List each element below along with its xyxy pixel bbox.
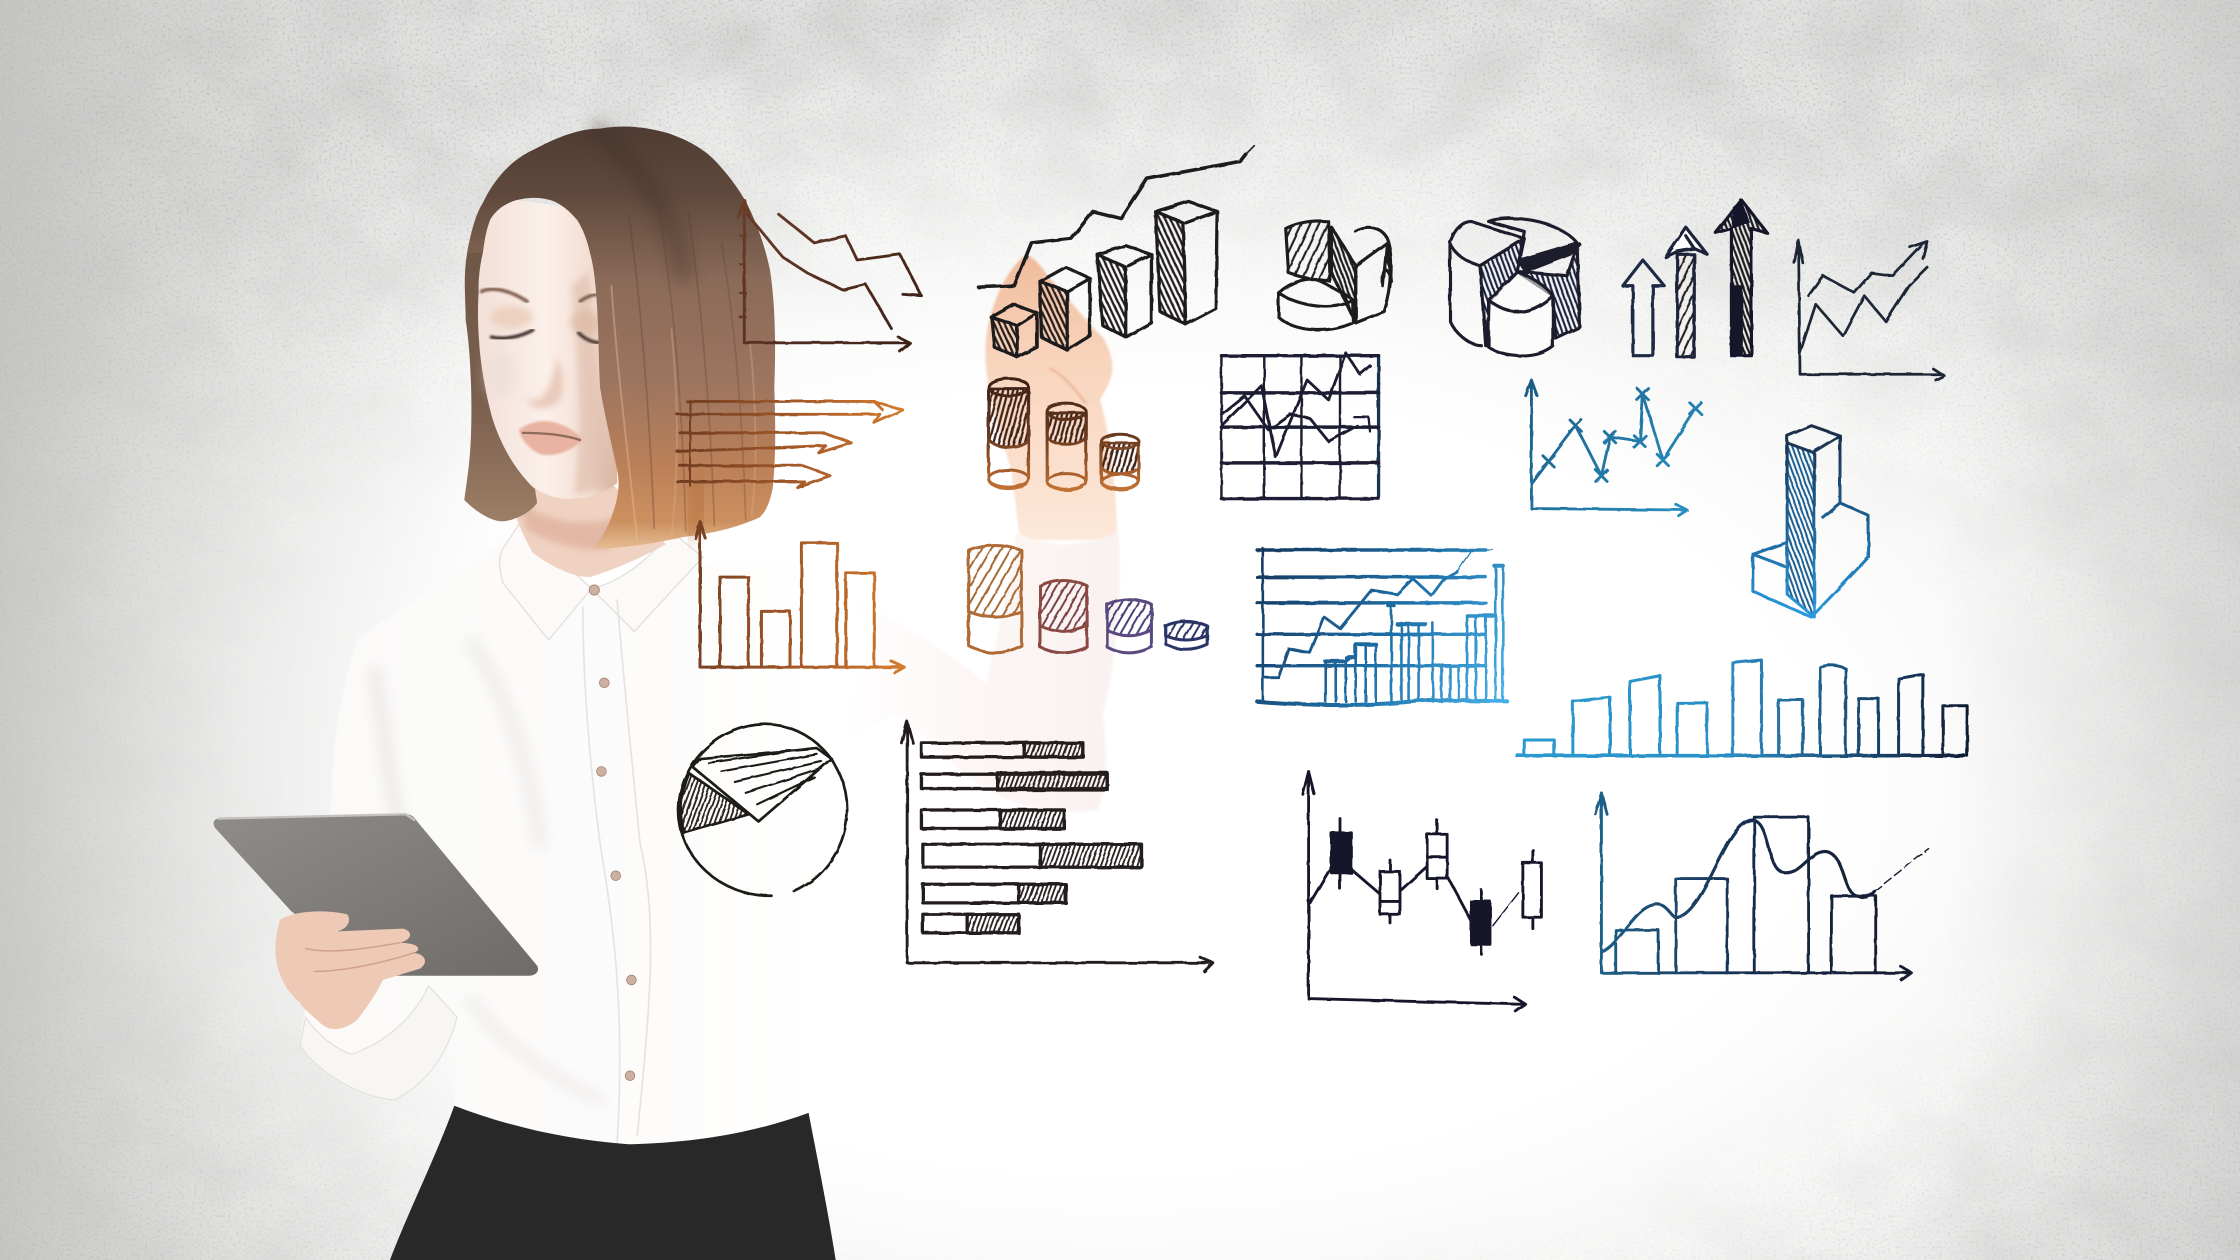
right eye xyxy=(579,333,601,343)
chart: three upward arrows xyxy=(1623,200,1767,357)
shirt collar xyxy=(500,523,703,640)
left eye shadow xyxy=(490,306,533,329)
skirt xyxy=(390,1106,836,1260)
right eye shadow xyxy=(570,311,601,334)
shirt torso and left sleeve xyxy=(300,523,871,1144)
chart: 3D blue tower xyxy=(1753,426,1869,617)
left eyebrow xyxy=(481,289,527,301)
right eyebrow xyxy=(580,294,599,301)
neck shadow xyxy=(520,503,614,550)
chart: two rising lines top right xyxy=(1794,240,1944,380)
raised arm with hand xyxy=(985,256,1117,540)
chart: candlesticks xyxy=(1303,771,1541,1011)
chart: horizontal orange arrows xyxy=(677,400,903,487)
chart: bars with smooth curve xyxy=(1596,793,1929,980)
chart: horizontal hatched bars xyxy=(901,721,1213,971)
bar 1 xyxy=(991,304,1037,357)
lips xyxy=(519,421,583,455)
nose shadow xyxy=(526,357,563,409)
bar 3 xyxy=(1097,246,1151,337)
tablet xyxy=(214,814,538,976)
face xyxy=(478,200,617,499)
hair strands xyxy=(600,131,756,540)
face shadow near hair xyxy=(571,271,614,494)
chart: blue combo of stepped bars and line xyxy=(1257,549,1507,705)
outline arrow xyxy=(1623,260,1664,356)
chart: 3D exploded pie xyxy=(1279,221,1391,330)
person: woman holding a tablet xyxy=(214,127,1120,1260)
shirt placket xyxy=(583,600,651,1143)
shirt buttons xyxy=(589,585,636,1081)
chart: blue bar chart xyxy=(1517,660,1967,756)
cheek grey shading xyxy=(486,351,514,397)
bar 2 xyxy=(1040,267,1090,350)
dark arrow xyxy=(1716,200,1767,356)
chart: falling lines xyxy=(739,200,921,351)
chart: circular pie sketch xyxy=(679,724,847,896)
left hair strip xyxy=(464,203,537,521)
chart: orange bar chart with axes xyxy=(696,521,904,673)
charts: hand-drawn sketches on the wall xyxy=(677,146,1967,1011)
chart: 3D cylinder pie xyxy=(1450,218,1580,356)
right hair curtain xyxy=(467,127,775,549)
neck xyxy=(517,486,666,577)
left eye xyxy=(491,330,533,338)
shirt sleeve of raised arm xyxy=(800,531,1120,812)
chart: three cylinders xyxy=(989,379,1139,490)
chart: hatched columns xyxy=(969,545,1207,653)
chart: rising 3D bars with trend line xyxy=(979,146,1254,357)
chart: grid with lines xyxy=(1221,353,1379,499)
bar 4 xyxy=(1156,201,1217,324)
hand holding tablet xyxy=(275,911,425,1029)
striped arrow xyxy=(1666,227,1707,357)
chart: blue line with crosses xyxy=(1526,380,1701,516)
left shirt cuff xyxy=(300,986,457,1100)
